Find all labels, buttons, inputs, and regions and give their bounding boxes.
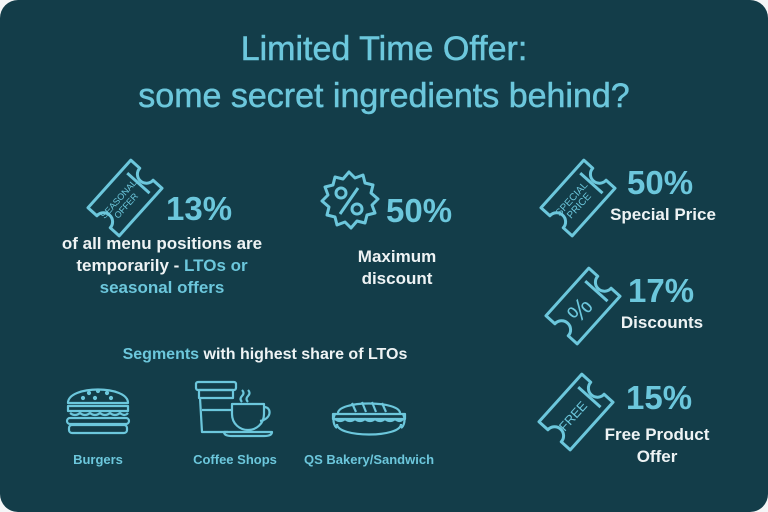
text: special price: Special Price <box>610 205 716 224</box>
icon: seasonal offer ticket <box>86 158 164 238</box>
icon: seasonal offer ticket: SEASONAL <box>99 178 139 220</box>
label: qs bakery: QS Bakery/Sandwich <box>304 452 434 467</box>
icon: coffee <box>194 380 274 438</box>
stat: 50% max: 50% <box>386 192 452 229</box>
icon: free ticket: FREE <box>556 398 590 434</box>
text: maximum discount: discount <box>362 269 432 288</box>
title <box>138 30 630 115</box>
stat: 17%: 17% <box>628 272 694 309</box>
text: maximum discount <box>358 247 436 288</box>
text: menu positions <box>62 234 262 297</box>
icon: special price ticket <box>539 158 617 238</box>
icon: discount ticket: % <box>561 291 599 328</box>
text: discounts: Discounts <box>621 313 703 332</box>
stat: 13%: 13% <box>166 190 232 227</box>
label: coffee shops: Coffee Shops <box>193 452 277 467</box>
icon: seasonal offer ticket: OFFER <box>112 191 140 220</box>
text: menu positions: temporarily - LTOs or <box>76 256 248 275</box>
icon: free ticket <box>537 372 615 452</box>
icon: percent badge <box>320 170 380 230</box>
text: maximum discount: Maximum <box>358 247 436 266</box>
icon: discount ticket <box>544 266 622 346</box>
stat: 50% special: 50% <box>627 164 693 201</box>
text: menu positions: of all menu positions are <box>62 234 262 253</box>
text: free product offer: Free Product <box>605 425 709 444</box>
icon: special price ticket: PRICE <box>565 191 594 221</box>
text: free product offer: Offer <box>637 447 677 466</box>
icon: special price ticket: SPECIAL <box>554 180 591 219</box>
title: Limited Time Offer: <box>241 30 527 68</box>
heading: segments: Segments with highest share of LTOs <box>123 346 407 363</box>
label: burgers: Burgers <box>73 452 123 467</box>
stat: 15%: 15% <box>626 379 692 416</box>
text: menu positions: seasonal offers <box>100 278 224 297</box>
title: some secret ingredients behind? <box>138 77 630 115</box>
icon: sandwich <box>332 402 406 436</box>
icon: burger <box>66 388 130 434</box>
text: free product offer <box>605 425 710 466</box>
